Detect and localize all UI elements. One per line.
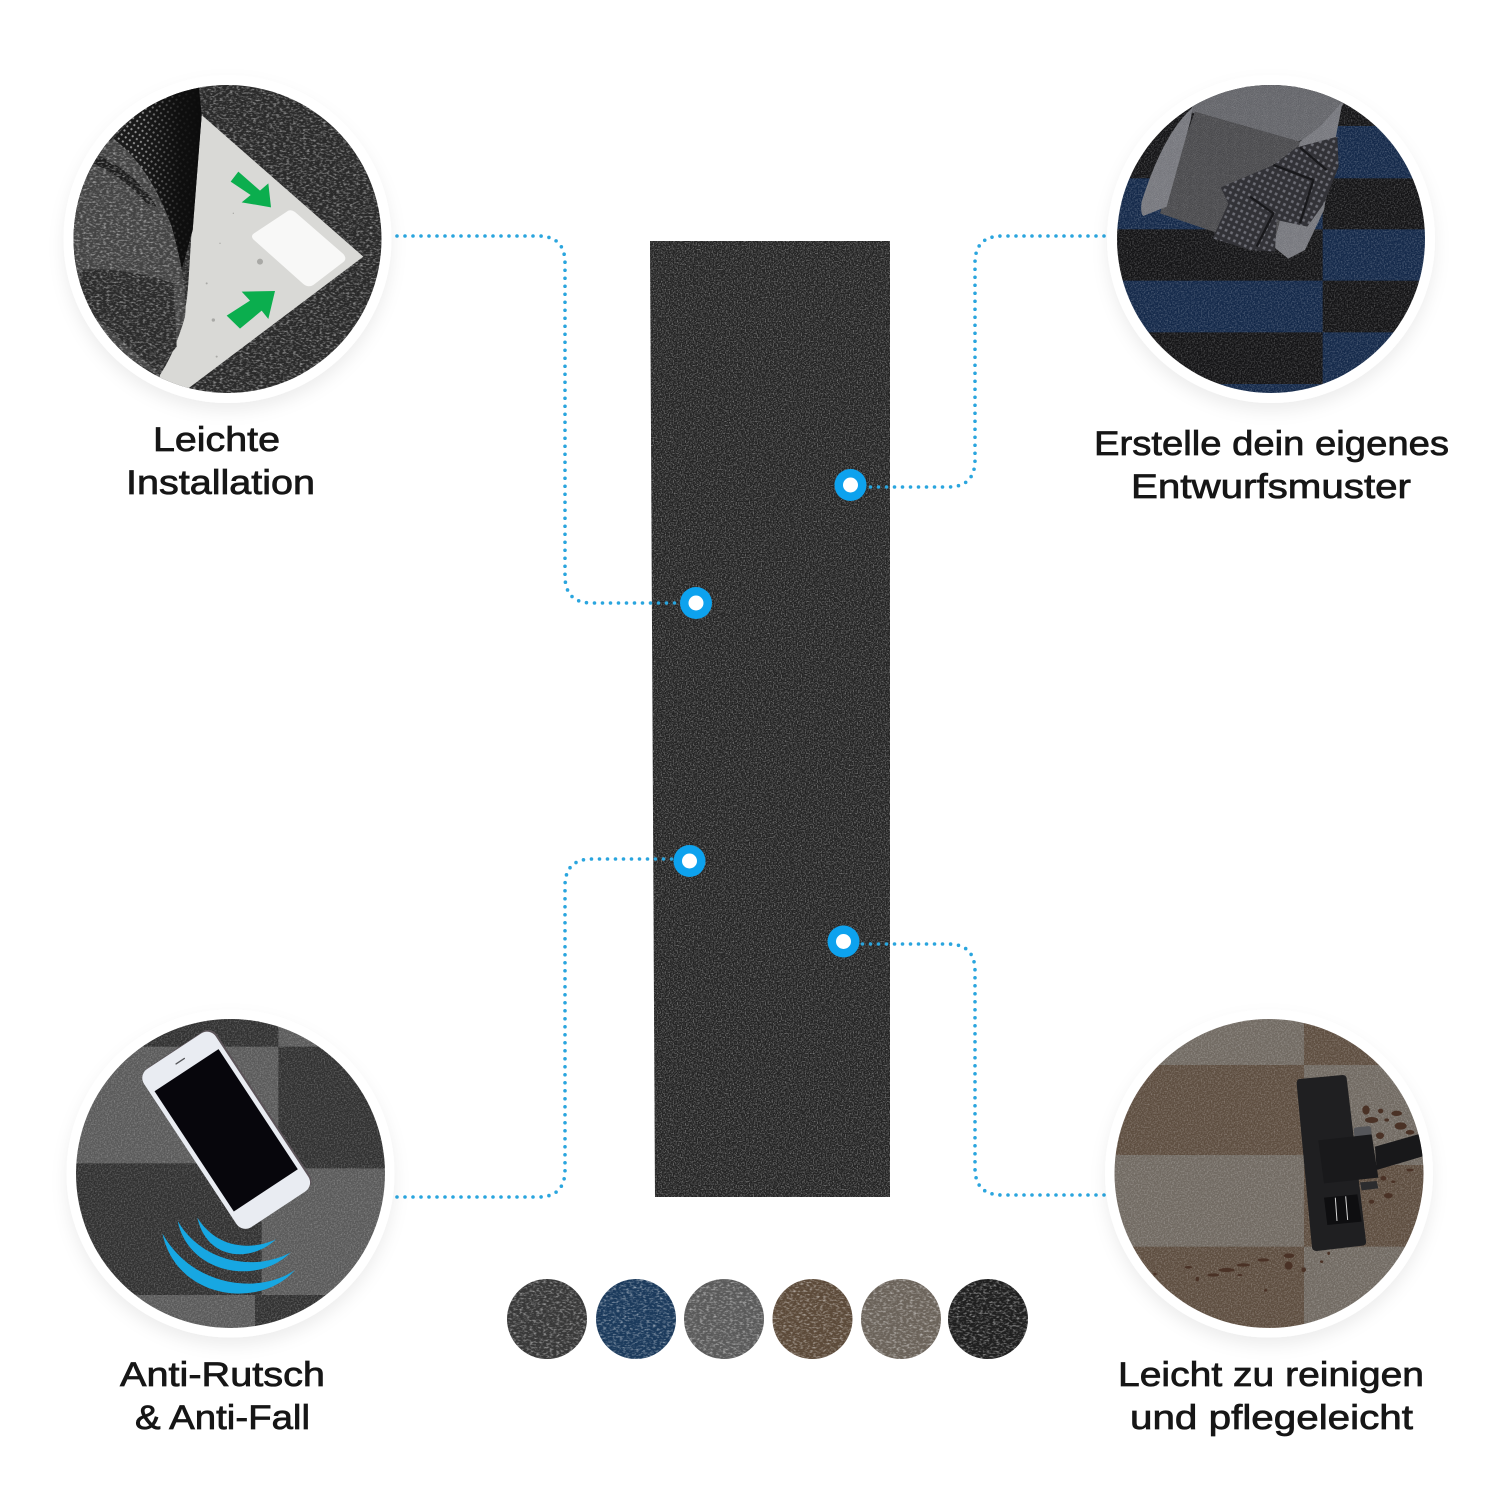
- green arrow top: [231, 172, 271, 207]
- panel: Anti-Rutsch: [66, 1010, 394, 1338]
- swatch: brown: [772, 1279, 852, 1359]
- colour swatches: [507, 1279, 1028, 1359]
- photo: tiled carpet with armchair: [1110, 80, 1433, 404]
- label: Anti-Rutsch & Anti-Fall: [120, 1356, 325, 1437]
- label: Leichte Installation: Leichte: [153, 421, 280, 459]
- connector: Entwurfsmuster: [868, 236, 1104, 487]
- blanket: [1213, 137, 1339, 252]
- phone: [138, 1026, 316, 1233]
- label: Erstelle dein eigenes Entwurfsmuster: Entwurfsmuster: [1131, 468, 1411, 506]
- armchair: [1141, 83, 1343, 259]
- marker: Leichte Installation: [680, 587, 712, 619]
- panel: Leichte Installation: [64, 75, 392, 403]
- label: Leicht zu reinigen und pflegeleicht: Leicht zu reinigen: [1118, 1356, 1424, 1394]
- photo: phone on carpet tiles: [70, 1010, 392, 1338]
- vibration waves: [162, 1218, 295, 1294]
- label: Erstelle dein eigenes Entwurfsmuster: [1094, 425, 1449, 506]
- connector: Anti-Rutsch: [397, 859, 674, 1197]
- label: Leicht zu reinigen und pflegeleicht: [1118, 1356, 1424, 1437]
- connector: Leichte Installation: [397, 236, 680, 603]
- swatch: grey: [684, 1279, 764, 1359]
- photo: vacuum cleaner on carpet tiles: [1114, 1019, 1424, 1328]
- carpet runner: [650, 241, 890, 1197]
- connector: Leicht zu reinigen: [860, 944, 1104, 1195]
- swatch: taupe: [861, 1279, 941, 1359]
- label: Anti-Rutsch & Anti-Fall: Anti-Rutsch: [120, 1356, 325, 1394]
- label: Leicht zu reinigen und pflegeleicht: und pflegeleicht: [1130, 1399, 1414, 1437]
- panel: Entwurfsmuster: [1107, 75, 1435, 404]
- swatch: black: [948, 1279, 1028, 1359]
- green arrow bottom: [227, 291, 275, 329]
- photo: folded carpet with adhesive sticker: [70, 80, 386, 398]
- marker: Anti-Rutsch: [674, 845, 706, 877]
- label: Erstelle dein eigenes Entwurfsmuster: Erstelle dein eigenes: [1094, 425, 1449, 463]
- label: Anti-Rutsch & Anti-Fall: & Anti-Fall: [135, 1399, 310, 1437]
- panel: Leicht zu reinigen: [1105, 1010, 1434, 1340]
- dirt: [1153, 1105, 1414, 1292]
- marker: Leicht zu reinigen: [828, 926, 860, 958]
- label: Leichte Installation: [126, 421, 315, 502]
- swatch: anthracite: [507, 1279, 587, 1359]
- vacuum nozzle: [1375, 1133, 1425, 1170]
- sticker: [252, 210, 345, 286]
- label: Leichte Installation: Installation: [126, 464, 315, 502]
- marker: Entwurfsmuster: [834, 469, 866, 501]
- swatch: navy: [596, 1279, 676, 1359]
